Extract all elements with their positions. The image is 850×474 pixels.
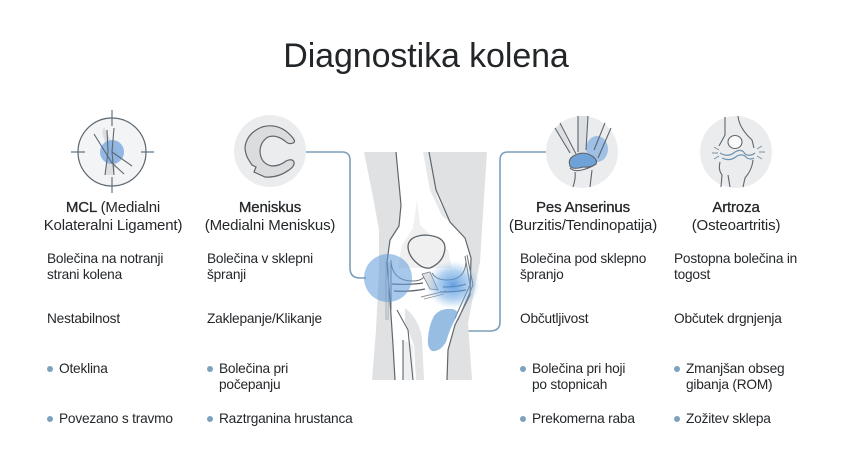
column text: Artroza: Občutek drgnjenja <box>674 311 782 326</box>
column text: MCL: Povezano s travmo <box>59 411 173 426</box>
bullet <box>47 366 53 372</box>
column text: MCL: Oteklina <box>59 361 108 376</box>
heading: Artroza: Artroza <box>712 199 760 216</box>
bullet <box>207 366 213 372</box>
title: Diagnostika kolena <box>283 37 569 75</box>
column text: MCL: Bolečina na notranji <box>47 251 163 266</box>
pain markers <box>364 254 412 302</box>
heading: MCL: MCL (Medialni <box>66 199 160 216</box>
fibula and tibia lower <box>397 310 413 380</box>
column text: Pes Anserinus: Občutljivost <box>520 311 588 326</box>
column text: MCL <box>47 251 173 426</box>
heading: Pes Anserinus <box>509 199 657 234</box>
column text: Pes Anserinus: Bolečina pod sklepno <box>520 251 646 266</box>
column text: Pes Anserinus <box>520 251 646 426</box>
patella <box>408 235 445 268</box>
heading: Artroza <box>692 199 780 234</box>
heading: MCL <box>44 199 182 234</box>
bullet <box>520 366 526 372</box>
femur and tibia shading <box>364 152 401 380</box>
bullet <box>47 416 53 422</box>
column text: Artroza: Postopna bolečina in <box>674 251 797 266</box>
heading: Meniskus: (Medialni Meniskus) <box>205 217 335 234</box>
column text: Meniskus: Zaklepanje/Klikanje <box>207 311 322 326</box>
column text: Meniskus: Bolečina pri <box>219 361 288 376</box>
heading: Pes Anserinus: Pes Anserinus <box>536 199 630 216</box>
bullet <box>674 366 680 372</box>
column text: Meniskus: Raztrganina hrustanca <box>219 411 353 426</box>
heading: Artroza: (Osteoartritis) <box>692 217 780 234</box>
bullet <box>520 416 526 422</box>
column text: Meniskus: počepanju <box>219 377 280 392</box>
menisci and joint <box>392 283 466 292</box>
column text: Artroza <box>674 251 797 426</box>
bullet <box>674 416 680 422</box>
column text: MCL: strani kolena <box>47 267 122 282</box>
column text: Pes Anserinus: špranjo <box>520 267 564 282</box>
heading: Meniskus: Meniskus <box>239 199 301 216</box>
column text: Meniskus: Bolečina v sklepni <box>207 251 313 266</box>
column text: MCL: Nestabilnost <box>47 311 120 326</box>
column text: Artroza: Zožitev sklepa <box>686 411 771 426</box>
column text: Meniskus <box>207 251 353 426</box>
heading: Pes Anserinus: (Burzitis/Tendinopatija) <box>509 217 657 234</box>
tendons <box>391 255 473 320</box>
bullet <box>207 416 213 422</box>
column text: Artroza: Zmanjšan obseg <box>686 361 784 376</box>
heading: MCL: Kolateralni Ligament) <box>44 217 182 234</box>
column text: Pes Anserinus: Prekomerna raba <box>532 411 635 426</box>
column text: Pes Anserinus: po stopnicah <box>532 377 607 392</box>
column text: Meniskus: špranji <box>207 267 246 282</box>
heading: Meniskus <box>205 199 335 234</box>
column text: Pes Anserinus: Bolečina pri hoji <box>532 361 625 376</box>
column text: Artroza: togost <box>674 267 710 282</box>
column text: Artroza: gibanja (ROM) <box>686 377 772 392</box>
